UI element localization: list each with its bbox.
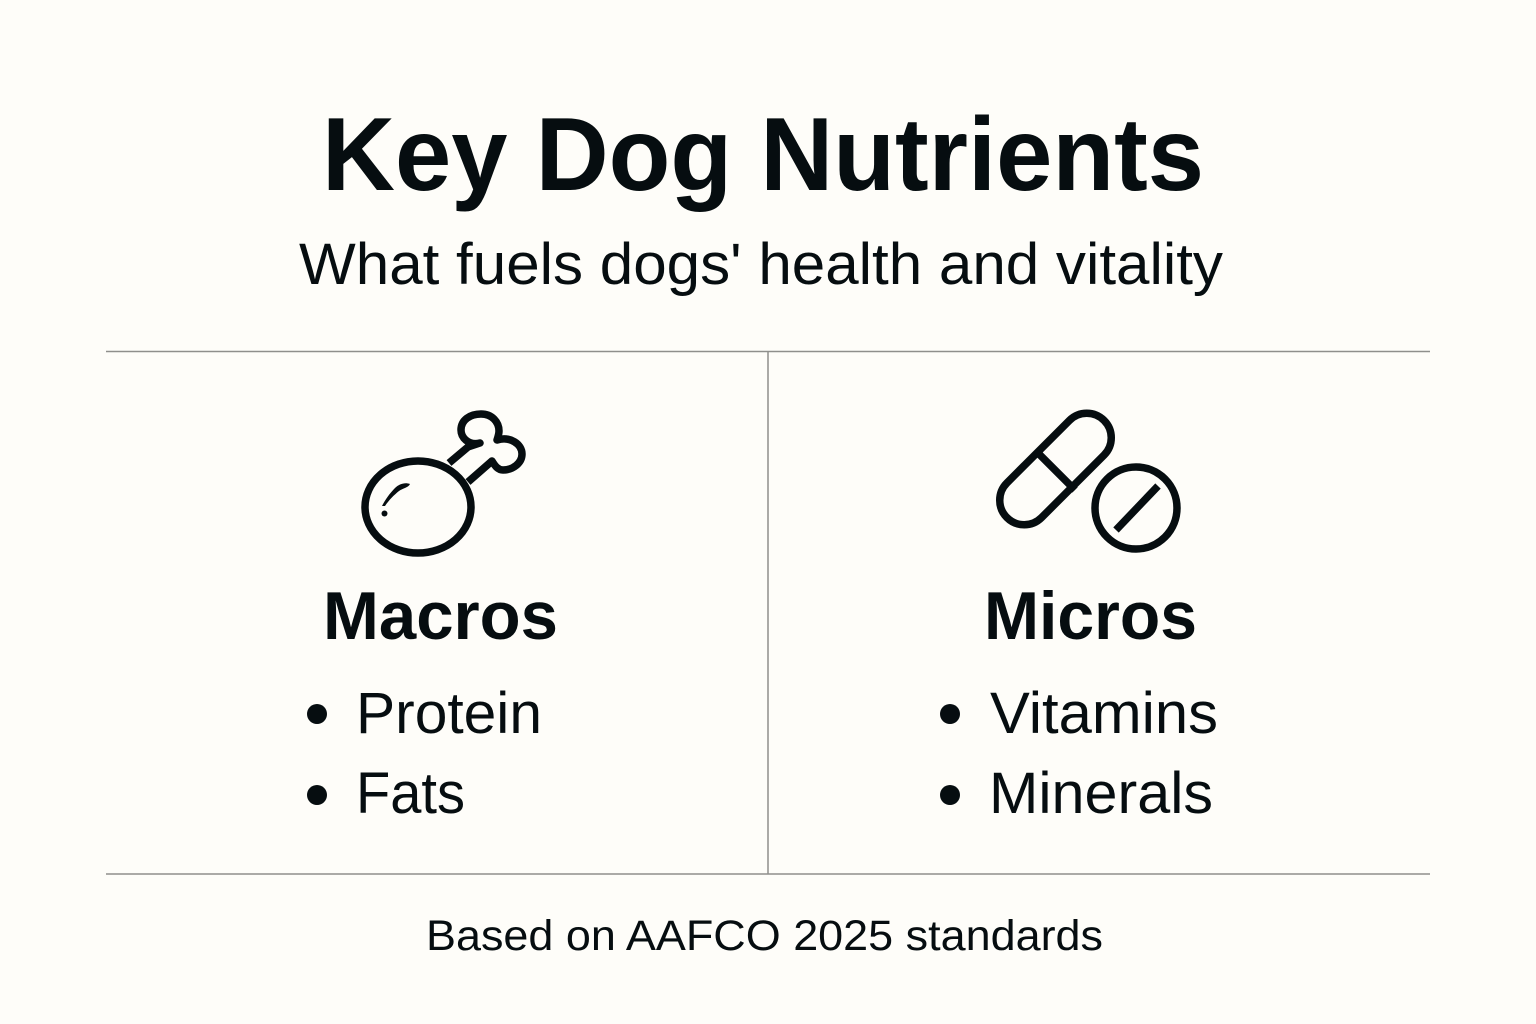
list: macros items: Fats: [356, 761, 465, 826]
icon: pills: [990, 403, 1177, 549]
heading: macros: Macros: [323, 578, 558, 654]
list: macros items: Protein: [356, 681, 542, 746]
title: Key Dog Nutrients: [322, 97, 1204, 213]
list: micros items: [940, 681, 1218, 826]
subtitle: What fuels dogs' health and vitality: [299, 232, 1223, 297]
list: micros items: Vitamins: [990, 681, 1218, 746]
list: micros items: Minerals: [989, 761, 1213, 826]
footnote: Based on AAFCO 2025 standards: [426, 912, 1103, 960]
list: macros items: [307, 681, 542, 826]
icon: chicken drumstick: [365, 414, 522, 553]
panel: macros: [307, 414, 558, 826]
heading: micros: Micros: [984, 578, 1197, 654]
panel: micros: [940, 403, 1218, 826]
